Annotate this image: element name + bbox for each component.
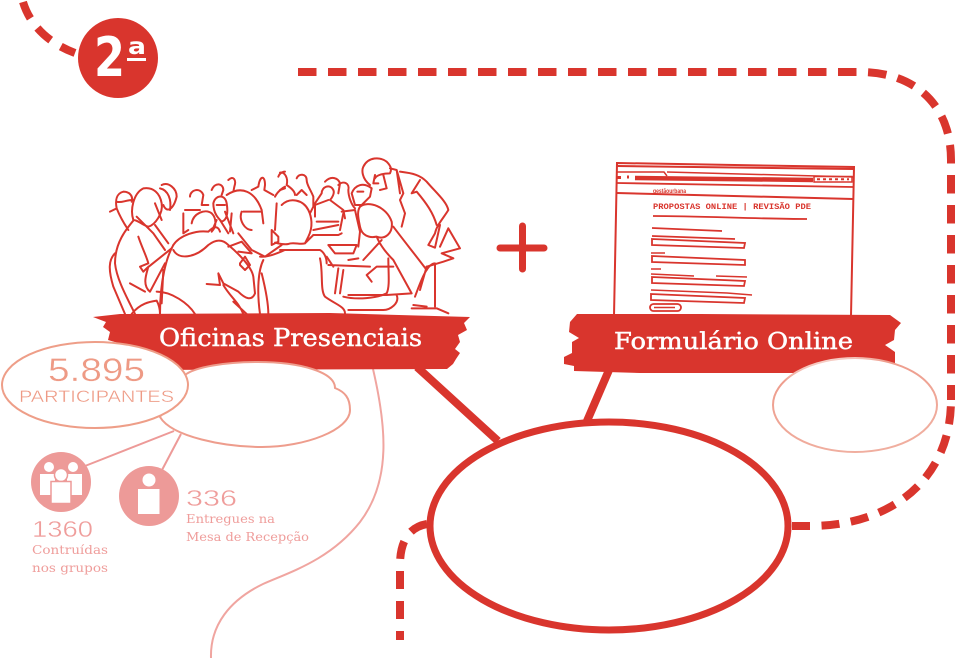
people right half bbox=[275, 158, 460, 313]
online form banner: Formulário Online bbox=[614, 329, 853, 355]
thin curve from workshops banner bbox=[211, 369, 383, 658]
workshops banner bbox=[93, 313, 470, 370]
stat: 1360 built in groups bbox=[32, 516, 108, 575]
dashed path: from previous step bbox=[23, 2, 75, 53]
illustration: group of people at workshop bbox=[110, 158, 460, 314]
step badge 2a bbox=[78, 18, 158, 98]
stat: 1360 built in groups: 1360 bbox=[32, 516, 93, 542]
logo text: gestãourbana bbox=[653, 189, 687, 195]
stat: 1360 built in groups: Contruídas bbox=[32, 542, 108, 557]
connector: online form to central ellipse bbox=[587, 370, 609, 421]
icon: group of people bbox=[31, 452, 91, 512]
step badge 2a: a bbox=[128, 34, 146, 60]
empty cloud callout bbox=[160, 362, 350, 447]
connector: workshops to central ellipse bbox=[417, 367, 498, 441]
online form banner bbox=[564, 314, 901, 373]
form title: PROPOSTAS ONLINE | REVISÃO PDE bbox=[653, 201, 811, 212]
stat: 1360 built in groups: nos grupos bbox=[32, 560, 108, 575]
icon: single person bbox=[119, 466, 179, 526]
participants oval: PARTICIPANTES bbox=[19, 387, 174, 406]
stat: 336 delivered at reception desk: Entregues na bbox=[186, 511, 276, 526]
dashed route: top and right side bbox=[298, 72, 951, 400]
illustration: browser window with online form bbox=[614, 163, 854, 316]
connector to group contributions icon bbox=[85, 431, 174, 466]
participants oval: 5.895 bbox=[48, 352, 145, 388]
central ellipse bbox=[430, 422, 788, 630]
workshops banner: Oficinas Presenciais bbox=[159, 324, 422, 352]
dashed route: from ellipse up the right side bbox=[792, 400, 951, 526]
empty oval callout right bbox=[773, 358, 937, 452]
stat: 336 delivered at reception desk: 336 bbox=[186, 485, 237, 511]
plus sign bbox=[500, 226, 544, 269]
stat: 336 delivered at reception desk bbox=[186, 485, 309, 544]
people left half bbox=[110, 172, 285, 314]
stat: 336 delivered at reception desk: Mesa de Recepção bbox=[186, 529, 309, 544]
participants oval bbox=[2, 342, 188, 428]
step badge 2a: 2 bbox=[94, 26, 125, 89]
dashed route: bottom left exit bbox=[400, 524, 427, 640]
connector to reception desk icon bbox=[162, 434, 181, 470]
